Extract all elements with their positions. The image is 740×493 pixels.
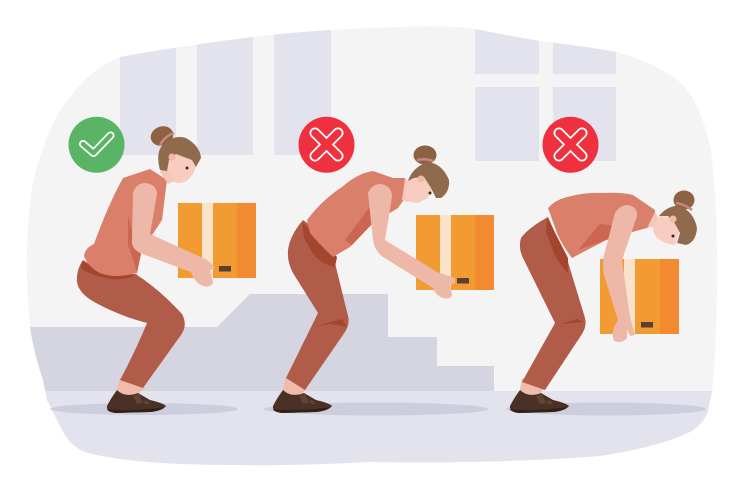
- bun: [674, 190, 694, 210]
- shoe: [510, 390, 569, 413]
- windows left: [120, 30, 331, 155]
- box: [416, 215, 494, 290]
- stairs: [0, 294, 494, 391]
- torso shade: [345, 208, 373, 245]
- face: [165, 150, 198, 183]
- knee fold: [313, 319, 347, 327]
- floor: [45, 391, 712, 466]
- windows right: [475, 20, 616, 161]
- torso: [548, 193, 655, 258]
- ankle: [283, 376, 307, 395]
- bun: [148, 123, 176, 149]
- ear: [670, 216, 676, 222]
- waistband: [81, 261, 138, 279]
- torso: [84, 169, 167, 276]
- hair: [158, 137, 201, 171]
- ankle: [117, 378, 145, 395]
- face: [405, 176, 433, 203]
- neck: [402, 178, 415, 202]
- box: [600, 259, 679, 334]
- icon: red cross badge right: [542, 117, 598, 173]
- face: [653, 216, 679, 245]
- neck: [648, 212, 660, 228]
- hip shade: [546, 217, 568, 273]
- box: [178, 203, 256, 278]
- torso: [307, 171, 405, 257]
- ear: [168, 154, 176, 160]
- icon: green check badge: [68, 117, 124, 173]
- icon: red cross badge middle: [298, 117, 354, 173]
- arm: [603, 205, 637, 342]
- ankle: [520, 378, 545, 395]
- shoe: [107, 390, 166, 413]
- pants: [77, 260, 185, 388]
- eye: [428, 192, 432, 194]
- arm: [368, 184, 455, 299]
- eye: [672, 234, 674, 238]
- shoe: [273, 390, 332, 413]
- torso shade: [578, 224, 618, 250]
- hair band: [676, 203, 692, 210]
- hip shade: [302, 222, 337, 267]
- floor shadows: [50, 402, 706, 416]
- figure 1: correct squat lift: [77, 123, 256, 413]
- neck: [160, 165, 176, 184]
- hair band: [417, 159, 433, 161]
- pants: [286, 220, 349, 390]
- hair: [408, 162, 449, 198]
- ear: [418, 176, 424, 182]
- bun: [414, 146, 436, 164]
- knee fold: [550, 319, 584, 327]
- eye: [186, 166, 188, 170]
- torso shade: [128, 215, 141, 273]
- arm: [132, 183, 215, 287]
- hair: [659, 206, 697, 245]
- hair band: [160, 133, 174, 145]
- figure 3: incorrect hunched lift: [510, 190, 697, 413]
- figure 2: incorrect bent-back lift: [273, 146, 494, 413]
- pants: [520, 217, 586, 390]
